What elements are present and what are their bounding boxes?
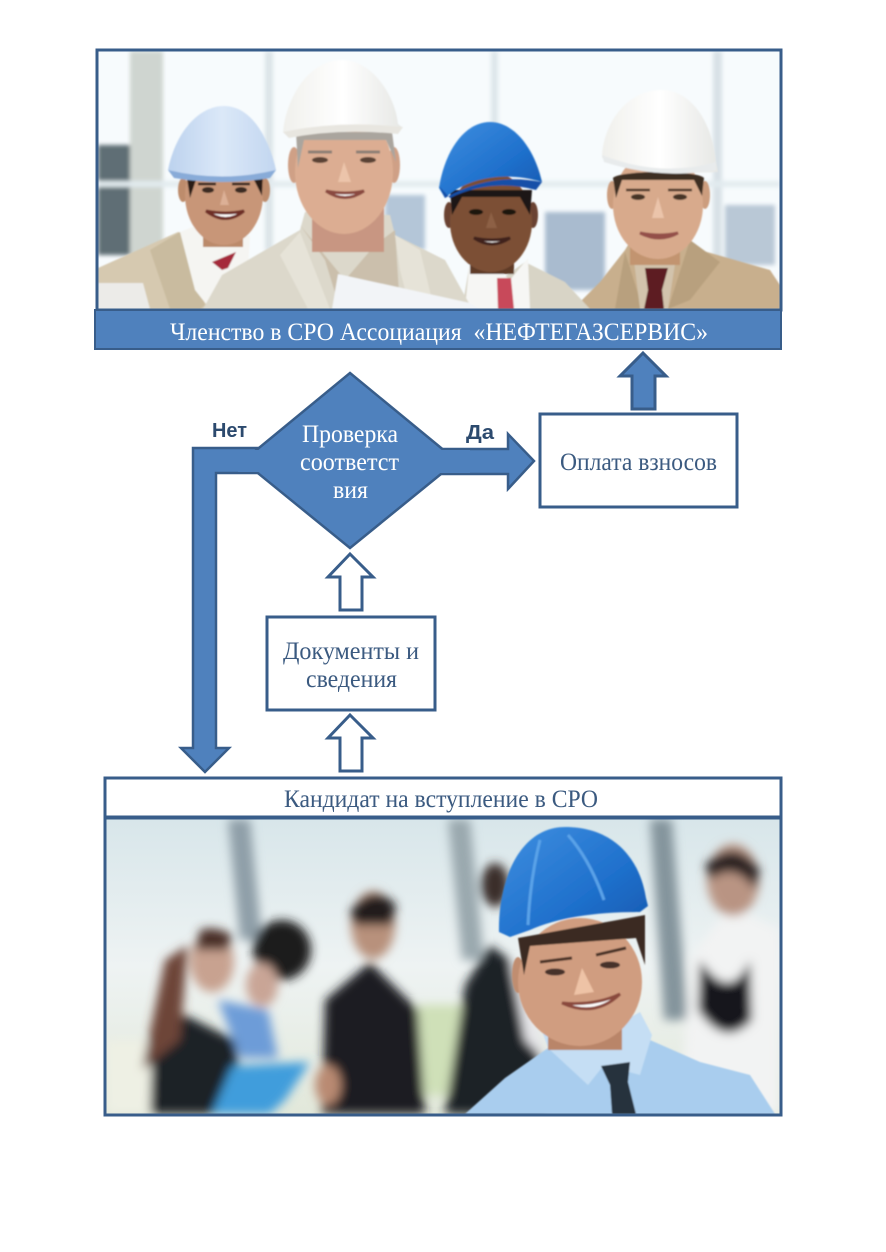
box: documents and information: Документы и: [283, 638, 419, 665]
decision diamond: compliance check: вия: [333, 477, 368, 504]
person 2: senior builder in white hard hat: [203, 60, 470, 309]
blurred office colleagues: [106, 819, 780, 1114]
hollow arrow: candidate to documents: [328, 715, 373, 771]
label: no: Нет: [212, 420, 247, 442]
blue hard hat: [499, 827, 648, 937]
box: documents and information: сведения: [306, 666, 397, 693]
arrow: payment up to membership: [620, 353, 666, 409]
panel: membership photo with banner: [95, 50, 781, 349]
person 4: white hard hat, tan jacket: [573, 90, 780, 309]
decision diamond: compliance check: [238, 373, 470, 548]
decision diamond: compliance check: Проверка: [302, 421, 398, 448]
person 3: blue hard hat: [439, 122, 590, 309]
label box: candidate: [105, 778, 781, 817]
hollow arrow: documents to check: [328, 554, 373, 610]
photo frame: [97, 50, 781, 310]
paper and laptop: [98, 274, 480, 309]
box: payment of fees: [540, 414, 737, 507]
banner: membership heading: [95, 310, 781, 349]
photo: four builders in hard hats: [98, 51, 780, 309]
photo frame: [105, 818, 781, 1115]
arrow: no, back to candidate: [181, 448, 262, 772]
box: documents and information: [267, 617, 435, 710]
panel: candidate label and photo: [105, 778, 781, 1115]
label: yes: Да: [466, 422, 495, 444]
decision diamond: compliance check: соответст: [300, 449, 399, 476]
box: payment of fees: Оплата взносов: [560, 449, 717, 476]
photo: candidate in blue hard hat: [106, 819, 780, 1114]
arrow: yes, to payment: [438, 434, 534, 489]
label box: candidate: Кандидат на вступление в СРО: [284, 786, 598, 813]
person 1: light blue hard hat: [98, 106, 276, 309]
candidate figure: [465, 827, 775, 1114]
banner: membership heading: Членство в СРО Ассоциация «НЕФТЕГАЗСЕРВИС»: [170, 319, 708, 346]
